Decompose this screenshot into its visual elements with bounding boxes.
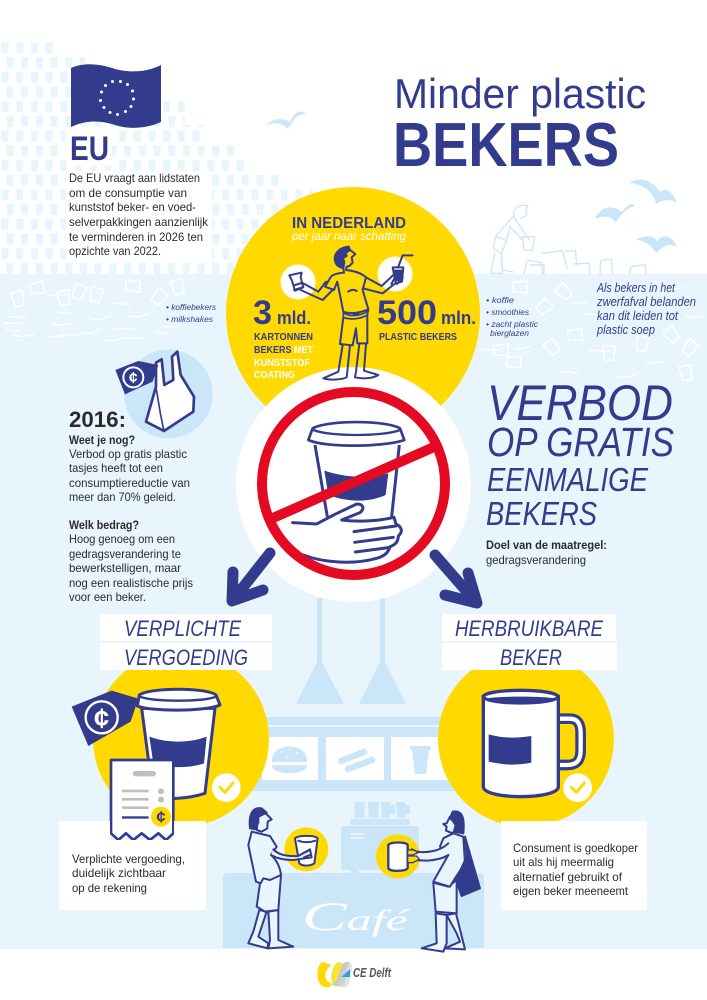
text block: EU request: te verminderen in 2026 ten	[69, 230, 203, 244]
text block: 2016	[69, 407, 193, 604]
banner: herbruikbare beker: BEKER	[500, 645, 562, 670]
text block: EU request: De EU vraagt aan lidstaten	[69, 171, 200, 185]
icon: cup	[137, 689, 220, 798]
counter with cafe sign: C afé	[302, 894, 411, 939]
text block: 2016: meer dan 70% geleid.	[69, 490, 176, 504]
text box: consument: alternatief gebruikt of	[513, 870, 623, 884]
text box: consument: uit als hij meermalig	[513, 855, 614, 869]
text block: zwerfafval: Als bekers in het	[596, 281, 675, 295]
arrow: left	[232, 553, 270, 601]
logo: CE Delft	[318, 962, 392, 987]
icon: receipt: ¢	[156, 808, 166, 827]
text block: 2016: nog een realistische prijs	[69, 576, 193, 590]
list: koffiebekers: • milkshakes	[166, 314, 214, 324]
person: left customer with paper cup	[248, 808, 328, 948]
stat: 3 mld: mld.	[277, 308, 311, 328]
text box: verplichte vergoeding	[59, 821, 206, 910]
icon: plastic bag with price tag: ¢	[129, 370, 138, 387]
customers at counter	[248, 808, 480, 952]
list: koffie smoothies: bierglazen	[490, 328, 529, 338]
birds	[266, 111, 677, 253]
figure holding two cups	[289, 247, 413, 380]
list: koffie smoothies: • koffie	[486, 295, 514, 305]
text block: zwerfafval: zwerfafval belanden	[596, 295, 696, 309]
text block: 2016: Verbod op gratis plastic	[69, 447, 187, 461]
icon: cup in sign	[308, 422, 404, 517]
list: koffie smoothies: • smoothies	[486, 307, 530, 317]
heading: verbod op gratis eenmalige bekers: OP GRATIS	[487, 419, 674, 465]
coffee machine	[341, 802, 419, 874]
text block: zwerfafval: kan dit leiden tot	[597, 309, 678, 323]
icon: price tag: ¢	[94, 702, 109, 733]
title	[393, 70, 646, 180]
person: right customer with mug and bag	[376, 811, 480, 952]
background pattern of stacked cups	[0, 40, 312, 274]
text block: 2016: consumptiereductie van	[69, 476, 190, 490]
text box: verplichte vergoeding: Verplichte vergoeding,	[72, 852, 185, 866]
stat: 500 mln	[377, 294, 476, 343]
text block: doel van de maatregel: gedragsverandering	[486, 553, 586, 567]
text block: 2016: 2016:	[69, 407, 126, 432]
stat: 3 mld: COATING	[254, 369, 295, 381]
icon: mug	[483, 690, 581, 797]
icon: snack	[341, 752, 372, 769]
text block: zwerfafval: plastic soep	[596, 323, 655, 337]
title: Minder plastic	[394, 70, 646, 117]
heading: verbod op gratis eenmalige bekers: VERBOD	[487, 375, 673, 431]
icon: EU flag	[71, 64, 161, 128]
stat: 500 mln: PLASTIC BEKERS	[379, 331, 457, 343]
heading: verbod op gratis eenmalige bekers	[486, 375, 674, 532]
text box: verplichte vergoeding: duidelijk zichtbaar	[72, 866, 166, 880]
menu board	[245, 717, 485, 791]
stat: 3 mld: 3	[253, 294, 272, 332]
hood pipes and hoods	[296, 598, 406, 704]
text block: 2016: Welk bedrag?	[69, 518, 139, 532]
banner: verplichte vergoeding	[100, 614, 272, 670]
text block: zwerfafval	[596, 281, 696, 337]
background water	[0, 274, 707, 949]
left yellow circle: verplichte vergoeding icons	[72, 651, 269, 840]
list: koffie smoothies: • zacht plastic	[486, 319, 539, 329]
litter picker figure	[491, 205, 646, 274]
text block: 2016: bewerkstelligen, maar	[69, 561, 181, 575]
banner: verplichte vergoeding: VERGOEDING	[124, 645, 248, 670]
prohibition ring and slash	[262, 392, 445, 575]
logo: CE Delft: CE Delft	[353, 966, 392, 980]
text block: doel van de maatregel: Doel van de maatregel:	[486, 538, 607, 552]
icon: plastic bag with price tag	[115, 350, 213, 438]
banner: herbruikbare beker: HERBRUIKBARE	[455, 616, 603, 641]
stat: 3 mld: KUNSTSTOF	[254, 357, 311, 369]
panel: in Nederland yellow circle	[226, 187, 480, 441]
title: BEKERS	[393, 111, 619, 180]
text box: verplichte vergoeding: op de rekening	[72, 881, 147, 895]
stat: 3 mld: BEKERS MET	[254, 344, 313, 356]
text box: consument: eigen beker meeneemt	[513, 884, 629, 898]
arrow: right	[435, 555, 477, 603]
heading: in Nederland: IN NEDERLAND	[292, 215, 406, 232]
stat: 500 mln: mln.	[441, 308, 476, 328]
banner: herbruikbare beker	[442, 614, 617, 670]
icon: check	[563, 773, 592, 802]
counter with cafe sign	[223, 873, 484, 948]
icon: receipt	[111, 760, 173, 840]
list: koffiebekers: • koffiebekers	[166, 302, 217, 312]
text block: EU request: selverpakkingen aanzienlijk	[69, 215, 209, 229]
text block: EU request: opzichte van 2022.	[69, 244, 161, 258]
stat: 3 mld	[253, 294, 313, 381]
floating litter in water	[4, 279, 704, 381]
text block: doel van de maatregel	[486, 538, 607, 567]
icon: burger	[272, 746, 307, 773]
text block: 2016: tasjes heeft tot een	[69, 461, 163, 475]
text block: 2016: Hoog genoeg om een	[69, 532, 175, 546]
white circle and prohibition sign	[236, 367, 471, 602]
heading: verbod op gratis eenmalige bekers: BEKERS	[486, 495, 597, 532]
list: koffie smoothies	[486, 295, 539, 338]
icon: hand	[277, 504, 402, 562]
icon: cup on menu	[410, 746, 431, 774]
text block: 2016: gedragsverandering te	[69, 547, 181, 561]
stat: 500 mln: 500	[377, 294, 437, 332]
text block: 2016: Weet je nog?	[69, 433, 135, 447]
text box: consument	[501, 821, 647, 910]
stat: 3 mld: KARTONNEN	[254, 331, 313, 343]
right yellow circle: herbruikbare beker icons	[438, 651, 614, 827]
text block: 2016: voor een beker.	[69, 590, 146, 604]
heading: EU: EU	[70, 130, 109, 168]
heading: verbod op gratis eenmalige bekers: EENMALIGE	[487, 461, 649, 498]
text block: EU request	[69, 171, 209, 258]
text block: EU request: kunststof beker- en voed-	[69, 200, 196, 214]
icon: check	[212, 773, 241, 802]
list: koffiebekers	[166, 302, 217, 324]
text box: consument: Consument is goedkoper	[513, 841, 638, 855]
banner: verplichte vergoeding: VERPLICHTE	[124, 616, 241, 641]
panel: in Nederland yellow circle: per jaar naar schatting	[291, 231, 407, 243]
icon: price tag	[72, 691, 138, 746]
text block: EU request: om de consumptie van	[69, 186, 187, 200]
